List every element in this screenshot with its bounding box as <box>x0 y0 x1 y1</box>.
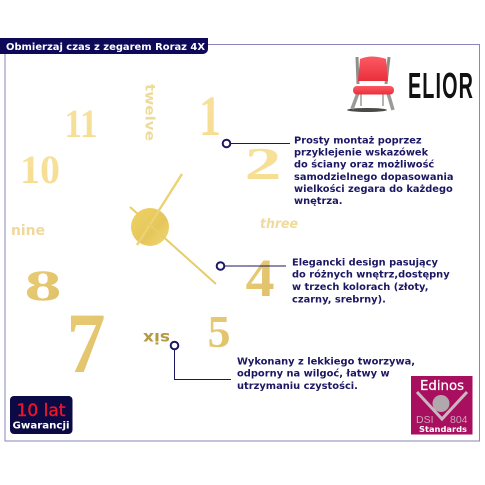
callout text: mounting: przyklejenie wskazówek <box>294 146 429 158</box>
callout connector 2 <box>217 262 286 270</box>
callout text: mounting: wnętrza. <box>294 196 342 207</box>
numeral 11: 11 <box>64 101 98 146</box>
word nine: nine <box>11 223 45 239</box>
numeral 4: 4 <box>246 248 274 308</box>
callout text: mounting: do ściany oraz możliwość <box>294 159 434 171</box>
numeral 8: 8 <box>24 263 62 310</box>
numeral 7: 7 <box>66 295 106 391</box>
callout text: material: odporny na wilgoć, łatwy w <box>237 368 390 380</box>
callout text: design: w trzech kolorach (złoty, <box>292 282 428 293</box>
Edinos standards badge <box>411 376 472 434</box>
Edinos standards badge: 804 <box>450 414 468 426</box>
callout text: design: do różnych wnętrz,dostępny <box>292 269 450 281</box>
callout text: mounting: wielkości zegara do każdego <box>294 183 453 195</box>
callout connector 3 <box>171 342 231 380</box>
callout text: mounting: Prosty montaż poprzez <box>294 136 422 146</box>
word three: three <box>260 216 298 232</box>
numeral 5: 5 <box>208 306 230 357</box>
callout text: mounting <box>294 136 454 207</box>
title banner: Obmierzaj czas z zegarem Roraz 4X <box>6 42 205 53</box>
warranty badge <box>10 396 72 434</box>
warranty badge: 10 lat <box>16 401 66 420</box>
numeral 2: 2 <box>244 138 282 189</box>
callout text: material: utrzymaniu czystości. <box>237 380 358 392</box>
callout text: design <box>292 258 450 305</box>
callout text: material <box>237 356 415 392</box>
warranty badge: Gwarancji <box>12 420 70 432</box>
Edinos standards badge: DSI <box>416 414 434 426</box>
callout text: design: czarny, srebrny). <box>292 294 386 305</box>
numeral 1: 1 <box>199 85 221 148</box>
title banner <box>0 38 208 54</box>
clock numerals <box>11 84 298 391</box>
callout connector 1 <box>223 140 290 147</box>
brand logo: chair <box>347 56 394 112</box>
word twelve: twelve <box>142 84 158 141</box>
Edinos standards badge: Edinos <box>420 379 464 394</box>
callout text: design: Elegancki design pasujący <box>292 258 438 268</box>
callout text: material: Wykonany z lekkiego tworzywa, <box>237 356 415 368</box>
clock hands and hub <box>130 174 216 284</box>
brand logo: ELIOR: ELIOR <box>408 67 473 107</box>
panel frame <box>5 44 480 441</box>
Edinos standards badge: Standards <box>419 425 467 434</box>
word six: six <box>143 329 170 347</box>
callout text: mounting: samodzielnego dopasowania <box>294 172 454 183</box>
numeral 10: 10 <box>20 147 60 192</box>
